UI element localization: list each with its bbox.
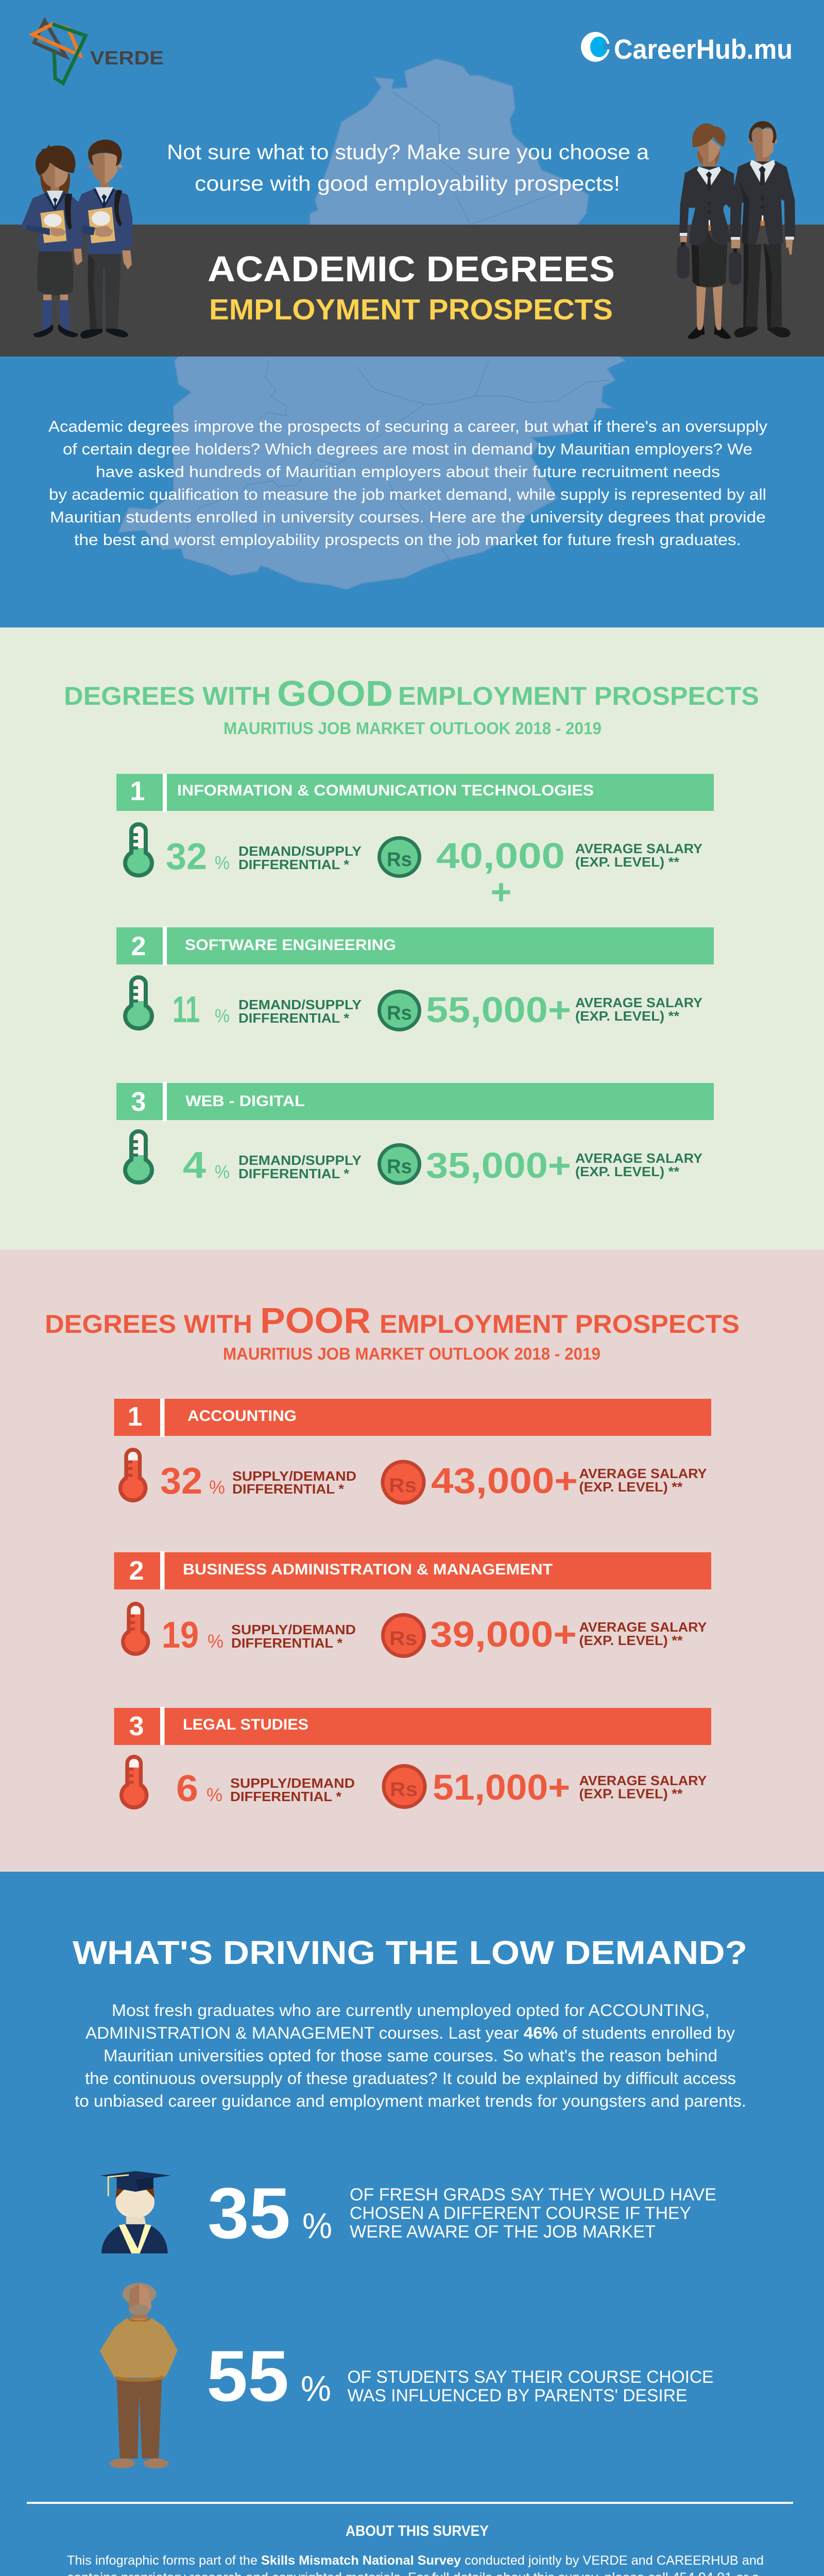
salary: 40,000+ [436, 836, 702, 912]
stat: 6%: DIFFERENTIAL * [230, 1789, 342, 1804]
salary: 40,000+: + [491, 872, 511, 912]
map of Mauritius [118, 59, 625, 589]
icon: thermometer [125, 977, 152, 1028]
icon: rupee coin [383, 1615, 424, 1656]
salary: 39,000+: 39,000+ [430, 1614, 577, 1654]
panel: degrees with poor prospects [0, 1250, 824, 1872]
stat: 32% [160, 1461, 356, 1502]
degree 1 bar: 1 [130, 776, 145, 806]
salary: 35,000+: (EXP. LEVEL) ** [575, 1164, 680, 1179]
degree 3 bar [114, 1707, 711, 1745]
icon: students [22, 140, 132, 338]
tagline: course with good employability prospects! [195, 172, 620, 195]
degree 2 bar: SOFTWARE ENGINEERING [185, 937, 396, 954]
degree 1 bar [116, 774, 714, 812]
icon: professionals [677, 121, 795, 339]
degree 1 bar: ACCOUNTING [187, 1408, 297, 1425]
subheading: MAURITIUS JOB MARKET OUTLOOK 2018 - 2019 [224, 719, 602, 738]
salary: 43,000+: AVERAGE SALARY [579, 1466, 707, 1481]
body text: the continuous oversupply of these graduates? It could be explained by difficult access [85, 2069, 736, 2088]
stat: 19%: SUPPLY/DEMAND [231, 1622, 356, 1637]
degree 2 bar: 2 [129, 1556, 144, 1586]
stat: 4%: 4 [183, 1145, 206, 1186]
body text: ADMINISTRATION & MANAGEMENT courses. Last year 46% of students enrolled by [85, 2024, 735, 2042]
stat: 32%: DIFFERENTIAL * [238, 857, 350, 872]
salary: 51,000+ [433, 1767, 707, 1807]
panel: degrees with good prospects [0, 628, 824, 1250]
stat: 11%: DEMAND/SUPPLY [238, 997, 362, 1012]
heading: degrees with good: DEGREES WITH [64, 682, 271, 710]
stat: 55% [207, 2335, 714, 2416]
stat: 32%: 32 [166, 836, 207, 877]
intro text: Mauritian students enrolled in university courses. Here are the university degrees that provide [50, 508, 766, 526]
tagline [167, 140, 649, 195]
intro text [48, 417, 768, 549]
heading: degrees with good: EMPLOYMENT PROSPECTS [398, 682, 759, 710]
stat: 11% [173, 989, 362, 1030]
stat: 55%: WAS INFLUENCED BY PARENTS' DESIRE [347, 2386, 687, 2405]
about text [67, 2553, 764, 2576]
icon: thermometer [121, 1450, 146, 1500]
degree 1 bar [114, 1399, 711, 1437]
stat: 32%: % [209, 1477, 225, 1498]
stat: 35%: 35 [208, 2173, 290, 2253]
intro text: by academic qualification to measure the job market demand, while supply is represented by all [49, 485, 766, 503]
stat: 6% [176, 1768, 355, 1809]
degree 3 bar: WEB - DIGITAL [185, 1093, 305, 1110]
icon: thermometer [125, 1131, 152, 1182]
salary: 43,000+ [431, 1461, 707, 1501]
heading: degrees with good: GOOD [277, 673, 393, 714]
stat: 32%: 32 [160, 1461, 202, 1502]
tagline: Not sure what to study? Make sure you choose a [167, 140, 649, 164]
stat: 35%: % [302, 2206, 332, 2246]
heading: degrees with poor: EMPLOYMENT PROSPECTS [380, 1310, 740, 1338]
stat: 55%: OF STUDENTS SAY THEIR COURSE CHOICE [347, 2367, 714, 2387]
stat: 32%: DIFFERENTIAL * [232, 1481, 345, 1497]
stat: 35%: CHOSEN A DIFFERENT COURSE IF THEY [350, 2204, 691, 2223]
stat: 35% [208, 2173, 716, 2253]
stat: 11%: % [215, 1005, 230, 1026]
intro text: of certain degree holders? Which degrees are most in demand by Mauritian employers? We [63, 440, 752, 458]
heading: degrees with poor [45, 1300, 740, 1341]
icon: thermometer [123, 1604, 148, 1654]
salary: 51,000+: (EXP. LEVEL) ** [579, 1786, 683, 1801]
logo: CareerHub: CareerHub.mu [614, 34, 793, 65]
salary: 39,000+: AVERAGE SALARY [579, 1619, 707, 1635]
icon: rupee coin [379, 1145, 419, 1183]
stat: 19%: % [208, 1631, 224, 1652]
body text: Most fresh graduates who are currently unemployed opted for ACCOUNTING, [112, 2001, 710, 2020]
icon: parent [100, 2283, 178, 2468]
icon: rupee coin [383, 1462, 424, 1503]
salary: 55,000+: 55,000+ [426, 990, 571, 1030]
degree 3 bar: 3 [129, 1711, 144, 1741]
icon: rupee coin: Rs [389, 1628, 417, 1650]
salary: 43,000+: 43,000+ [431, 1461, 578, 1501]
logo: Verde: VERDE [90, 47, 164, 69]
stat: 11%: 11 [173, 989, 200, 1030]
heading: degrees with good [64, 673, 759, 714]
salary: 40,000+: (EXP. LEVEL) ** [575, 854, 680, 870]
degree 2 bar: 2 [131, 931, 146, 961]
salary: 55,000+ [426, 990, 702, 1030]
salary: 35,000+: AVERAGE SALARY [575, 1150, 702, 1166]
icon: rupee coin [379, 838, 419, 876]
salary: 51,000+: 51,000+ [433, 1767, 570, 1807]
salary: 40,000+: AVERAGE SALARY [575, 841, 702, 856]
salary: 55,000+: (EXP. LEVEL) ** [575, 1008, 680, 1024]
intro text: the best and worst employability prospects on the job market for future fresh graduates. [74, 531, 741, 549]
icon: thermometer [122, 1757, 147, 1807]
salary: 35,000+ [426, 1145, 702, 1185]
stat: 19%: DIFFERENTIAL * [231, 1635, 343, 1651]
salary: 39,000+: (EXP. LEVEL) ** [579, 1633, 683, 1648]
stat: 32% [166, 836, 362, 877]
stat: 32%: DEMAND/SUPPLY [238, 843, 362, 859]
salary: 40,000+: 40,000 [436, 836, 565, 876]
degree 3 bar: LEGAL STUDIES [183, 1716, 308, 1733]
subheading: MAURITIUS JOB MARKET OUTLOOK 2018 - 2019 [223, 1344, 600, 1363]
icon: rupee coin: Rs [387, 1002, 412, 1024]
stat: 4%: DIFFERENTIAL * [238, 1166, 350, 1181]
stat: 4%: % [215, 1161, 230, 1182]
icon: rupee coin: Rs [387, 1156, 412, 1178]
stat: 32%: SUPPLY/DEMAND [232, 1468, 356, 1484]
heading: WHAT'S DRIVING THE LOW DEMAND? [73, 1934, 747, 1971]
stat: 4%: DEMAND/SUPPLY [238, 1153, 362, 1168]
icon: thermometer [125, 824, 152, 875]
icon: rupee coin [379, 991, 419, 1029]
logo: Verde [32, 21, 164, 83]
degree 3 bar: 3 [131, 1087, 146, 1117]
body text [75, 2001, 746, 2110]
degree 1 bar: 1 [128, 1402, 142, 1432]
intro text: have asked hundreds of Mauritian employers about their future recruitment needs [96, 463, 720, 481]
icon: rupee coin: Rs [389, 1475, 417, 1497]
stat: 35%: OF FRESH GRADS SAY THEY WOULD HAVE [350, 2185, 716, 2205]
body text: to unbiased career guidance and employment market trends for youngsters and parents. [75, 2092, 746, 2110]
stat: 19% [162, 1615, 356, 1656]
stat: 6%: SUPPLY/DEMAND [230, 1775, 355, 1791]
body text: Mauritian universities opted for those same courses. So what's the reason behind [104, 2046, 717, 2065]
degree 1 bar: INFORMATION & COMMUNICATION TECHNOLOGIES [177, 782, 594, 799]
about text: This infographic forms part of the Skills Mismatch National Survey conducted jointly by VERDE and CAREERHUB and [67, 2553, 764, 2568]
stat: 55%: % [301, 2368, 331, 2409]
icon: rupee coin [384, 1766, 425, 1807]
icon: rupee coin: Rs [387, 849, 412, 871]
panel: what's driving the low demand [0, 1872, 824, 2576]
stat: 11%: DIFFERENTIAL * [238, 1010, 350, 1026]
stat: 35%: WERE AWARE OF THE JOB MARKET [350, 2222, 656, 2242]
stat: 4% [183, 1145, 362, 1186]
salary: 51,000+: AVERAGE SALARY [579, 1773, 707, 1788]
degree 2 bar [114, 1551, 711, 1589]
degree 3 bar [116, 1082, 714, 1121]
degree 2 bar [116, 926, 714, 965]
heading: academic degrees: ACADEMIC DEGREES [208, 249, 615, 289]
stat: 6%: 6 [176, 1768, 198, 1809]
stat: 55%: 55 [207, 2335, 289, 2416]
intro text: Academic degrees improve the prospects of securing a career, but what if there's an oversupply [48, 417, 768, 435]
salary: 35,000+: 35,000+ [426, 1145, 571, 1185]
stat: 32%: % [215, 852, 230, 873]
salary: 55,000+: AVERAGE SALARY [575, 995, 702, 1010]
heading: degrees with poor: DEGREES WITH [45, 1310, 252, 1338]
stat: 19%: 19 [162, 1615, 199, 1656]
salary: 43,000+: (EXP. LEVEL) ** [579, 1479, 683, 1495]
salary: 39,000+ [430, 1614, 707, 1654]
title band [0, 225, 824, 357]
degree 2 bar: BUSINESS ADMINISTRATION & MANAGEMENT [183, 1561, 553, 1578]
panel: header [0, 0, 824, 628]
icon: graduate [100, 2171, 171, 2253]
stat: 6%: % [207, 1784, 222, 1805]
heading: about this survey: ABOUT THIS SURVEY [346, 2523, 489, 2539]
heading: degrees with poor: POOR [260, 1300, 371, 1341]
heading: employment prospects: EMPLOYMENT PROSPECTS [209, 293, 613, 326]
icon: rupee coin: Rs [390, 1778, 418, 1801]
